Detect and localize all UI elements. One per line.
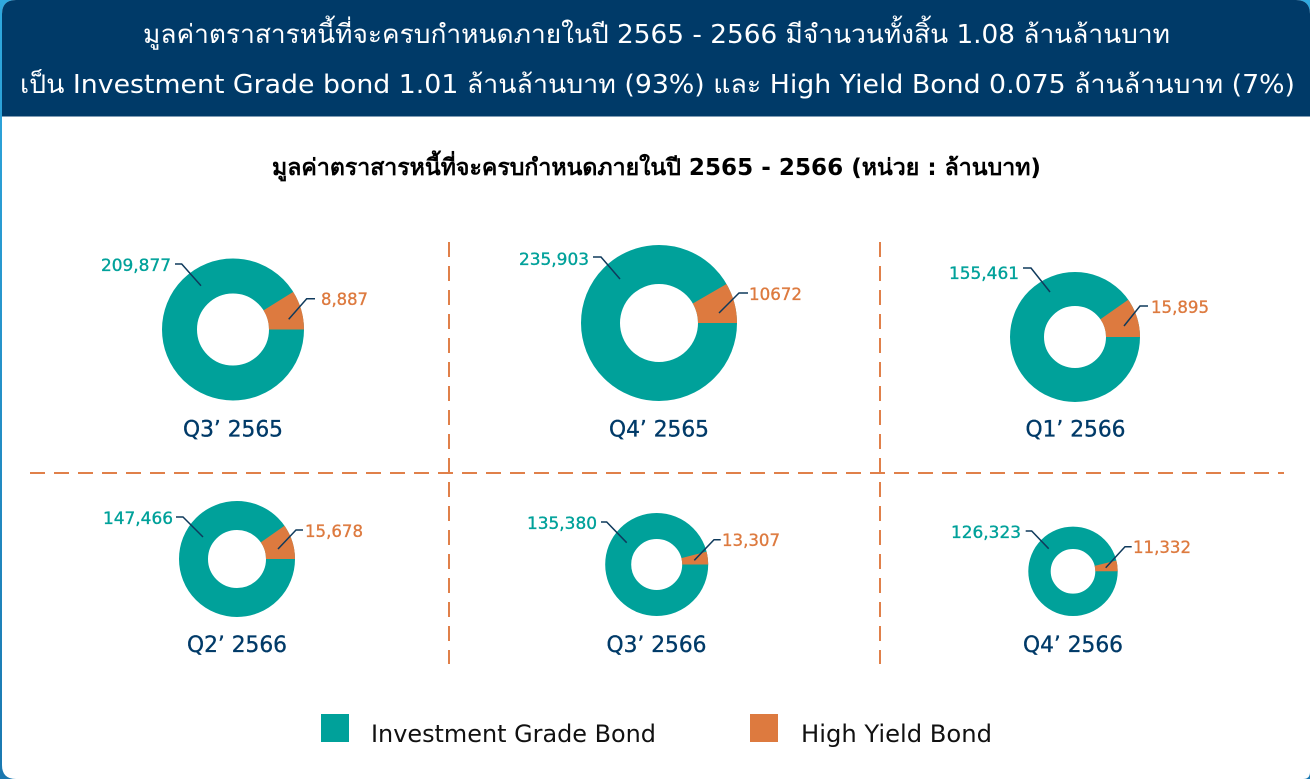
donut: Q4 2565 <box>519 250 802 442</box>
donut: Q2 2566: 147,466 <box>103 509 173 529</box>
donut: Q3 2565: Q3’ 2565 <box>183 418 283 442</box>
donut: Q4 2566: Q4’ 2566 <box>1023 633 1123 658</box>
donut: Q3 2565 <box>101 256 368 442</box>
title banner: มูลค่าตราสารหนี้ที่จะครบกำหนดภายในปี 2565 - 2566 มีจำนวนทั้งสิ้น 1.08 ล้านล้านบาท <box>143 15 1170 50</box>
donut: Q3 2566: 135,380 <box>527 514 597 534</box>
donut: Q3 2565: 8,887 <box>321 290 368 310</box>
donut: Q3 2566 <box>527 514 780 658</box>
donut: Q4 2565: Q4’ 2565 <box>609 418 709 442</box>
donut: Q4 2565: 235,903 <box>519 250 589 270</box>
donut: Q3 2566: Q3’ 2566 <box>606 633 706 658</box>
legend: Investment Grade Bond <box>371 720 656 748</box>
chart heading: มูลค่าตราสารหนี้ที่จะครบกำหนดภายในปี 2565 - 2566 (หน่วย : ล้านบาท) <box>272 150 1041 182</box>
donut: Q2 2566: 15,678 <box>305 522 363 542</box>
donut: Q4 2566: 126,323 <box>951 523 1021 543</box>
donut: Q1 2566: 155,461 <box>949 264 1019 284</box>
donut: Q4 2566 <box>951 523 1191 658</box>
donut: Q1 2566 <box>949 264 1209 442</box>
legend <box>321 714 992 748</box>
donut: Q3 2566: 13,307 <box>722 531 780 551</box>
title banner: เป็น Investment Grade bond 1.01 ล้านล้านบาท (93%) และ High Yield Bond 0.075 ล้านล้านบาท (7%) <box>20 68 1295 100</box>
donut: Q1 2566: 15,895 <box>1151 298 1209 318</box>
donut: Q2 2566: Q2’ 2566 <box>187 633 287 658</box>
legend: High Yield Bond <box>801 720 992 748</box>
donut: Q4 2566: 11,332 <box>1133 538 1191 558</box>
donut: Q1 2566: Q1’ 2566 <box>1026 418 1126 442</box>
donut: Q4 2565: 10672 <box>749 285 802 305</box>
title banner <box>2 0 1310 116</box>
donut: Q3 2565: 209,877 <box>101 256 171 276</box>
donut: Q2 2566 <box>103 509 363 658</box>
